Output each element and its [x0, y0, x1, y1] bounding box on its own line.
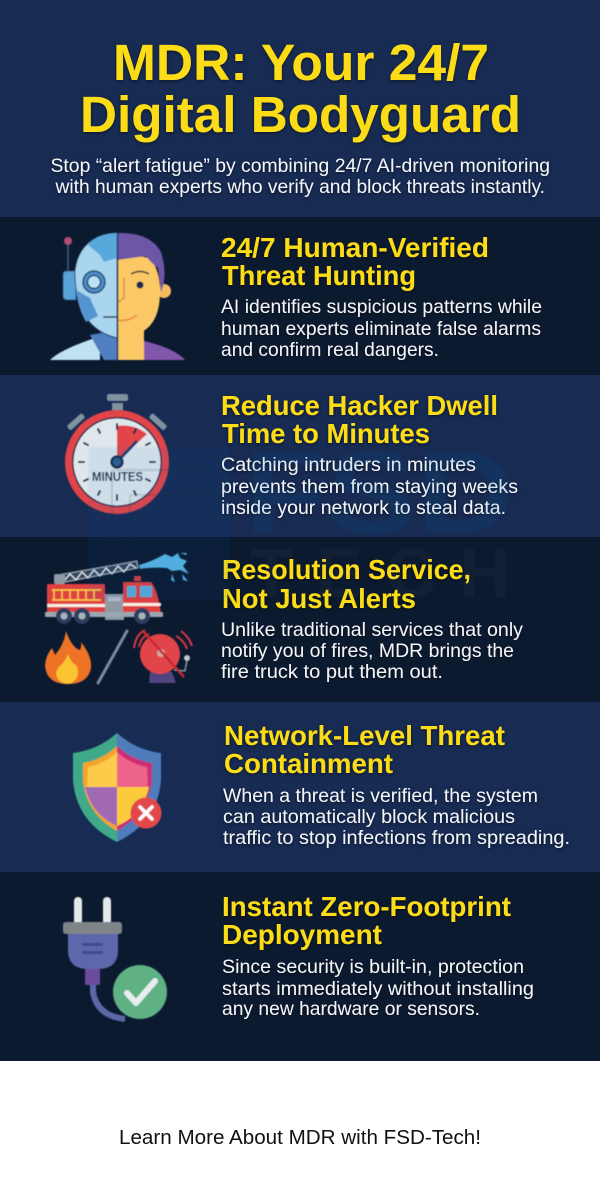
feature heading: Containment — [224, 748, 393, 779]
panel: network-level threat containment — [0, 702, 600, 872]
feature description: any new hardware or sensors. — [222, 998, 480, 1020]
feature description — [221, 454, 518, 519]
feature heading: Not Just Alerts — [222, 583, 416, 614]
alarm bell — [134, 630, 192, 683]
feature description: and confirm real dangers. — [221, 339, 439, 361]
subtitle: with human experts who verify and block threats instantly. — [55, 176, 545, 198]
footer call to action: Learn More About MDR with FSD-Tech! — [119, 1127, 481, 1149]
subtitle: Stop “alert fatigue” by combining 24/7 AI-driven monitoring — [50, 155, 550, 177]
feature description — [221, 619, 523, 683]
feature description: starts immediately without installing — [222, 978, 534, 1000]
icon: stopwatch — [65, 394, 169, 514]
icon: fire truck, flame and crossed-out alarm bell — [45, 553, 192, 684]
panel: instant zero-footprint deployment — [0, 872, 600, 1061]
feature heading — [221, 232, 489, 291]
feature description — [222, 956, 534, 1020]
feature heading: Deployment — [222, 919, 382, 950]
feature description — [223, 785, 570, 849]
feature heading — [224, 720, 505, 779]
feature description: prevents them from staying weeks — [221, 476, 518, 498]
feature heading: Network-Level Threat — [224, 720, 505, 751]
watermark: FSD Tech logo: TECH — [250, 534, 510, 612]
panel: reduce hacker dwell time — [0, 375, 600, 537]
feature heading — [222, 554, 471, 614]
feature description: Unlike traditional services that only — [221, 619, 523, 641]
panel: header — [0, 0, 600, 217]
title: Digital Bodyguard — [80, 86, 521, 143]
feature description: fire truck to put them out. — [221, 661, 443, 683]
flame — [45, 631, 91, 684]
feature description: Since security is built-in, protection — [222, 956, 524, 978]
feature description: When a threat is verified, the system — [223, 785, 538, 807]
feature heading: Resolution Service, — [222, 554, 471, 585]
feature description: traffic to stop infections from spreading. — [223, 827, 570, 849]
feature heading: Instant Zero-Footprint — [222, 891, 511, 922]
title — [80, 34, 521, 143]
subtitle — [50, 155, 550, 198]
feature description: can automatically block malicious — [223, 806, 515, 828]
watermark: FSD Tech logo — [88, 427, 514, 612]
icon: stopwatch: MINUTES — [92, 469, 143, 484]
icon: shield with blocked badge — [73, 733, 162, 842]
panel: resolution service — [0, 537, 600, 702]
icon: plug with check mark — [63, 897, 167, 1019]
feature heading — [221, 390, 498, 449]
title: MDR: Your 24/7 — [113, 34, 489, 91]
feature description: AI identifies suspicious patterns while — [221, 296, 542, 318]
feature description — [221, 296, 542, 361]
feature description: human experts eliminate false alarms — [221, 318, 541, 340]
feature heading: Threat Hunting — [222, 260, 416, 291]
watermark: FSD Tech logo: FSD — [244, 427, 514, 559]
icon: half robot half human head — [50, 233, 185, 360]
feature description: inside your network to steal data. — [221, 497, 506, 519]
fire truck — [45, 553, 189, 624]
feature heading: Reduce Hacker Dwell — [221, 390, 498, 421]
feature heading — [222, 891, 511, 950]
feature heading: 24/7 Human-Verified — [221, 232, 489, 263]
feature description: notify you of fires, MDR brings the — [221, 640, 514, 662]
feature description: Catching intruders in minutes — [221, 454, 476, 476]
panel: human-verified threat hunting — [0, 217, 600, 375]
feature heading: Time to Minutes — [222, 418, 430, 449]
slash — [98, 631, 127, 683]
